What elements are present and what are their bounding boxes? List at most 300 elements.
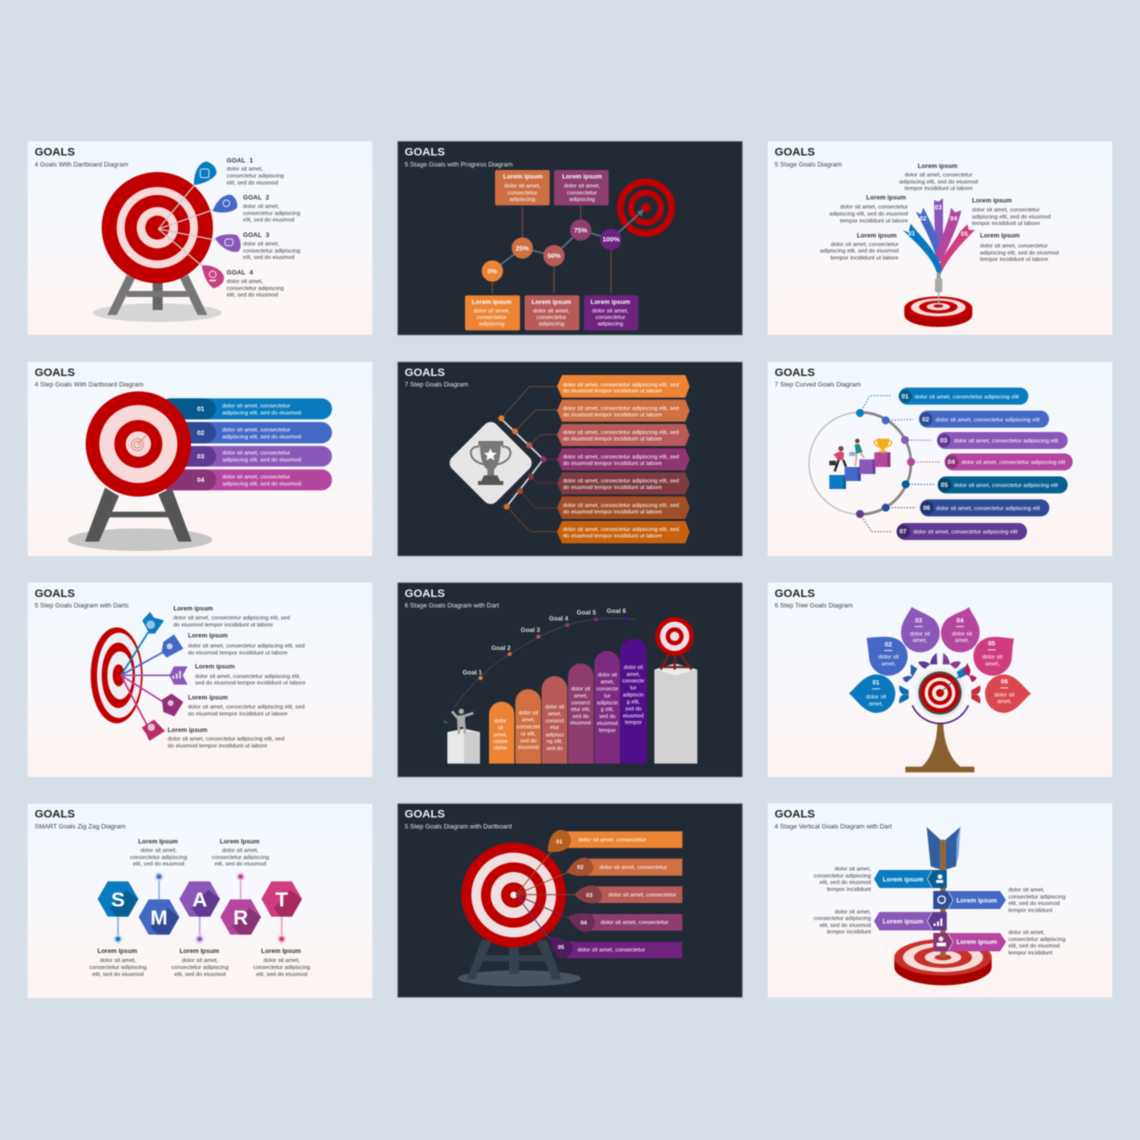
- dart 5: [121, 675, 165, 741]
- text 3: Lorem ipsum: [195, 664, 235, 671]
- bar 01: [548, 830, 682, 852]
- subtitle: 4 Stage Vertical Goals Diagram with Dart: [775, 823, 892, 830]
- text 1: dolor sit amet,: [835, 866, 871, 872]
- bar 5: adipiscin: [597, 700, 618, 706]
- text 5: dolor sit amet, consectetur adipiscing elit, sed: [168, 737, 284, 743]
- icon: dart flight: [957, 666, 967, 678]
- goal labels: Goal 1: [463, 669, 482, 676]
- hexagon A: A: [192, 888, 207, 911]
- title: GOALS: [405, 588, 445, 600]
- text T: consectetur adipiscing: [253, 965, 310, 971]
- arrow shaft: [940, 840, 946, 958]
- angled dartboard: [91, 627, 143, 723]
- step 03: adipiscing elit, sed do eiusmod: [222, 458, 301, 464]
- bar 1: dolor sit amet, consectetur adipiscing elit, sed: [563, 382, 679, 388]
- petal 02: 02: [885, 641, 892, 648]
- step 04: [160, 469, 332, 490]
- dartboard: [86, 391, 191, 497]
- box: bottom 3: adipiscing: [597, 322, 623, 328]
- sign 3: Lorem ipsum: [883, 918, 924, 925]
- text 2: elit, sed do eiusmod: [1008, 901, 1060, 907]
- box: bottom 1: consectetur: [477, 315, 507, 321]
- box: bottom 3: dolor sit amet,: [592, 308, 629, 314]
- text 4: consectetur adipiscing: [1008, 937, 1066, 943]
- 3D target: [894, 939, 992, 985]
- text S: elit, sed do eiusmod: [92, 972, 144, 978]
- bar 3: consect: [545, 718, 565, 724]
- title: GOALS: [775, 809, 815, 821]
- hexagon R: R: [233, 906, 248, 929]
- panel: 6 step tree: [768, 583, 1112, 777]
- right pedestal: [654, 664, 697, 764]
- step 03: [160, 446, 332, 467]
- text M: consectetur adipiscing: [130, 855, 187, 861]
- icon: goal 1 pin: [194, 162, 216, 185]
- text 4: elit, sed do eiusmod: [1008, 944, 1060, 950]
- stand: [458, 940, 581, 986]
- bar 3: dolor sit: [545, 705, 565, 711]
- bar 5: consecte: [596, 686, 618, 692]
- dart barrel: [935, 273, 942, 305]
- text 5: Lorem ipsum: [168, 727, 208, 734]
- bar 2: eiusmod: [518, 745, 539, 751]
- box: bottom 2: consectetur: [536, 315, 566, 321]
- goal 2 text: dolor sit amet,: [243, 204, 280, 210]
- left pedestal and thrower: [443, 709, 480, 764]
- goal 2 text: GOAL 2: [243, 195, 270, 202]
- bar 1: amet,: [494, 732, 508, 738]
- box: top 2: Lorem ipsum: [562, 174, 602, 181]
- goal 1 text: elit, sed do eiusmod: [227, 180, 278, 186]
- petal 05: 05: [988, 641, 996, 648]
- box: bottom 3: [584, 295, 638, 330]
- bar 05: [549, 936, 682, 959]
- pill 05: dolor sit amet, consectetur adipiscing elit: [954, 483, 1059, 489]
- pill 05: 05: [941, 482, 948, 489]
- bar 6: dolor sit: [624, 665, 643, 671]
- box: top 1: consectetur: [507, 190, 537, 196]
- text 1: elit, sed do eiusmod: [820, 880, 871, 886]
- title: GOALS: [35, 367, 75, 379]
- target: [620, 182, 672, 233]
- text 4: do eiusmod tempor incididunt ut labore: [188, 711, 288, 717]
- subtitle: 4 Step Goals With Dartboard Diagram: [35, 382, 143, 389]
- bar 5: [594, 651, 620, 764]
- bar 6: g elit,: [627, 699, 640, 705]
- bar 7: dolor sit amet, consectetur adipiscing elit, sed: [563, 527, 679, 533]
- box: top 2: [554, 170, 609, 205]
- step 03: dolor sit amet, consectetur: [222, 451, 290, 457]
- text 04: Lorem ipsum: [972, 197, 1012, 204]
- pill 03: dolor sit amet, consectetur adipiscing elit: [954, 439, 1059, 445]
- hexagon M: [139, 899, 179, 935]
- node 0%: 0%: [488, 268, 497, 275]
- box: bottom 1: adipiscing: [479, 322, 505, 328]
- bar 5: dolor sit: [598, 673, 617, 679]
- text 3: elit, sed do eiusmod: [820, 923, 871, 929]
- stand and shadow: [93, 275, 222, 322]
- bar 7: [557, 521, 690, 543]
- bar 5: tur: [604, 693, 611, 699]
- bar 4: etur elit,: [571, 707, 591, 713]
- pill 04: 04: [948, 459, 955, 466]
- bar 2: sed do: [520, 738, 537, 744]
- bar 3: [542, 676, 567, 764]
- petal 01: dolor sit: [866, 694, 887, 700]
- bar 3: [557, 424, 690, 446]
- subtitle: 7 Step Goals Diagram: [405, 382, 468, 389]
- text 03: adipiscing elit, sed do eiusmod: [899, 179, 978, 185]
- goal 2 text: consectetur adipiscing: [243, 211, 300, 217]
- bar 3: adipisci: [546, 732, 564, 738]
- bar 02: [567, 858, 682, 876]
- text 3: consectetur adipiscing: [814, 916, 871, 922]
- text S: consectetur adipiscing: [89, 965, 147, 971]
- hexagon A: [179, 881, 220, 917]
- goal 4 text: elit, sed do eiusmod: [227, 293, 278, 299]
- bar 04: 04: [581, 921, 588, 927]
- text 5: do eiusmod tempor incididunt ut labore: [168, 744, 267, 750]
- bar 2: consectet: [517, 725, 540, 731]
- flights: 04: [950, 215, 958, 222]
- connectors: [118, 877, 282, 939]
- text 3: sed do eiusmod tempor incididunt ut labore: [195, 681, 306, 687]
- petal 04: amet,: [955, 638, 970, 644]
- bar 2: [515, 689, 541, 764]
- box: top 2: adipiscing: [569, 197, 595, 203]
- goal labels: [463, 608, 626, 676]
- hexagon T: [261, 881, 302, 917]
- text 1: consectetur adipiscing: [814, 873, 871, 879]
- text R: elit, sed do eiusmod: [215, 862, 266, 868]
- panel: 7 step trophy: [398, 362, 742, 556]
- bar 4: [568, 663, 594, 764]
- text A: Lorem Ipsum: [179, 948, 220, 955]
- goal 4 text: dolor sit amet,: [227, 279, 263, 285]
- text 01: Lorem ipsum: [857, 232, 897, 239]
- text 4: tempor incididunt: [1008, 951, 1053, 957]
- subtitle: 6 Step Tree Goals Diagram: [775, 603, 853, 610]
- bar 05: dolor sit amet, consectetur: [577, 948, 645, 954]
- dart 4: [121, 675, 183, 716]
- text T: elit, sed do eiusmod: [256, 972, 307, 978]
- bar 4: dolor sit: [571, 686, 591, 692]
- box: bottom 1: Lorem ipsum: [472, 299, 512, 306]
- hexagon R: [220, 899, 261, 935]
- text M: elit, sed do eiusmod: [133, 862, 184, 868]
- bar 5: do eiusmod tempor incididunt ut labore: [563, 485, 662, 491]
- goal 1 text: GOAL 1: [227, 157, 253, 164]
- bar 03: 03: [586, 893, 592, 899]
- bar 5: eiusmod: [597, 721, 618, 727]
- hexagon M: M: [150, 906, 168, 929]
- sign 4: Lorem ipsum: [956, 939, 997, 946]
- petal 03: amet,: [913, 638, 928, 644]
- step 01: 01: [197, 406, 205, 413]
- text 3: tempor incididunt: [827, 930, 871, 936]
- goal labels: Goal 2: [491, 645, 511, 652]
- text 1: Lorem ipsum: [173, 605, 213, 612]
- box: bottom 3: consectetur: [595, 315, 625, 321]
- hexagon S: S: [111, 888, 125, 911]
- goal labels: Goal 3: [521, 627, 540, 634]
- text 01: adipiscing elit, sed do eiusmod: [820, 249, 899, 255]
- petal 04: 04: [956, 617, 964, 624]
- bar 04: dolor sit amet, consectetur: [601, 920, 669, 926]
- bar 5: [557, 472, 690, 494]
- bar 4: eiusmod: [570, 721, 591, 727]
- title: GOALS: [775, 367, 815, 379]
- bar 2: ur elit,: [521, 731, 536, 737]
- petal 04: [941, 607, 980, 652]
- icon: goal 4 pin: [202, 265, 224, 288]
- box: top 1: Lorem ipsum: [503, 174, 543, 181]
- leaf wings: [899, 653, 981, 704]
- box: bottom 2: adipiscing: [538, 322, 564, 328]
- text 01: dolor sit amet, consectetur: [831, 242, 899, 248]
- pill 02: 02: [922, 416, 930, 423]
- pill 07: [897, 523, 1027, 540]
- bar 4: amet,: [574, 693, 588, 699]
- text R: Lorem Ipsum: [220, 838, 260, 845]
- pill 04: [945, 453, 1073, 470]
- goal markers: [479, 616, 627, 680]
- bar 6: [620, 639, 647, 764]
- bar 6: tempor: [625, 720, 642, 726]
- text 05: dolor sit amet, consectetur: [980, 243, 1048, 249]
- dartboard: [915, 668, 965, 718]
- petal 04: dolor sit: [952, 631, 973, 637]
- text S: Lorem Ipsum: [97, 948, 138, 955]
- pill 01: 01: [901, 393, 909, 400]
- step 02: 02: [197, 430, 205, 437]
- text 05: Lorem ipsum: [980, 233, 1020, 240]
- step 04: 04: [197, 477, 205, 484]
- node 25%: 25%: [516, 245, 529, 252]
- bar 4: sed do: [572, 714, 589, 720]
- box: top 1: adipiscing: [509, 197, 535, 203]
- petal 02: amet,: [881, 661, 896, 667]
- icon: trophy: [874, 439, 892, 453]
- title: GOALS: [405, 809, 445, 821]
- bar 6: sed do: [625, 706, 642, 712]
- panel: 5 stage dart: [768, 141, 1112, 335]
- step 02: dolor sit amet, consectetur: [222, 427, 290, 433]
- bar 3: amet,: [548, 711, 562, 717]
- bar 1: ctetur: [494, 746, 507, 752]
- subtitle: 5 Step Goals Diagram with Dartboard: [405, 823, 512, 830]
- text 04: tempor incididunt ut labore: [972, 221, 1040, 227]
- bar 04: [568, 913, 682, 932]
- bar 02: 02: [577, 865, 583, 871]
- title: GOALS: [775, 588, 815, 600]
- petal 06: 06: [1001, 679, 1008, 686]
- text T: Lorem Ipsum: [261, 948, 301, 955]
- goal labels: Goal 4: [549, 615, 569, 622]
- pill 02: [919, 411, 1049, 428]
- chevron line: [501, 419, 543, 507]
- dartboard: [102, 172, 215, 283]
- petal 03: dolor sit: [910, 631, 931, 637]
- goal 3 text: GOAL 3: [243, 232, 270, 239]
- nodes: [856, 409, 915, 518]
- bar 6: consecte: [622, 679, 644, 685]
- box: bottom 1: dolor sit amet,: [474, 308, 510, 314]
- text 2: tempor incididunt: [1008, 908, 1053, 914]
- panel: 5 step dartboard dark: [398, 804, 742, 997]
- text M: dolor sit amet,: [141, 848, 177, 854]
- text 03: Lorem ipsum: [918, 163, 958, 170]
- flights: [903, 198, 975, 273]
- bar 02: dolor sit amet, consectetur: [599, 865, 667, 871]
- bar 05: 05: [558, 945, 564, 951]
- climbers: [829, 439, 864, 471]
- node 25%: [512, 237, 533, 259]
- text T: dolor sit amet,: [264, 958, 300, 964]
- text 2: dolor sit amet,: [1008, 887, 1045, 893]
- bar 2: do eiusmod tempor incididunt ut labore: [563, 413, 662, 419]
- bar 01: 01: [556, 840, 562, 846]
- node 50%: [543, 245, 565, 266]
- sign 2: Lorem ipsum: [956, 897, 997, 904]
- bar 6: amet,: [627, 672, 641, 678]
- text M: Lorem Ipsum: [138, 838, 178, 845]
- arc: [912, 705, 968, 723]
- bar 5: amet,: [601, 680, 615, 686]
- text 03: dolor sit amet, consectetur: [905, 173, 973, 179]
- step 01: dolor sit amet, consectetur: [222, 404, 290, 410]
- pill 07: 07: [899, 529, 907, 536]
- dartboard: [461, 843, 566, 947]
- pill 03: [937, 432, 1068, 449]
- node 100%: [600, 229, 622, 250]
- flights: 02: [919, 215, 927, 222]
- petal 03: [901, 607, 940, 652]
- tree trunk: [905, 723, 974, 772]
- subtitle: 5 Stage Goals Diagram: [775, 161, 842, 168]
- title: GOALS: [35, 588, 75, 600]
- sign 1: [874, 870, 947, 888]
- box: bottom 2: [525, 295, 579, 330]
- title: GOALS: [405, 367, 445, 379]
- box: top 1: [495, 170, 550, 205]
- icon: goal 2 pin: [213, 195, 237, 213]
- dart 3: [121, 666, 188, 685]
- sign 4: [933, 933, 1006, 951]
- text 1: dolor sit amet, consectetur adipiscing elit, sed: [173, 615, 290, 621]
- arrow flights: [927, 827, 960, 870]
- node 100%: 100%: [602, 237, 620, 244]
- bar 1: do eiusmod tempor incididunt ut labore: [563, 389, 662, 395]
- board: [904, 296, 972, 327]
- text 2: do eiusmod tempor incididunt ut labore: [188, 650, 288, 656]
- step 04: dolor sit amet, consectetur: [222, 474, 290, 480]
- box: top 2: dolor sit amet,: [564, 183, 601, 189]
- bar 3: etur: [550, 725, 560, 731]
- panel: 5 stage progress: [398, 141, 742, 335]
- text 1: do eiusmod tempor incididunt ut labore: [173, 622, 273, 628]
- target on stand: [655, 617, 694, 670]
- pill 06: 06: [923, 505, 931, 512]
- bar 6: tur: [630, 686, 637, 692]
- bar 4: dolor sit amet, consectetur adipiscing elit, sed: [563, 454, 679, 460]
- bar 3: do eiusmod tempor incididunt ut labore: [563, 437, 662, 443]
- pill 06: [920, 499, 1049, 516]
- goal 3 text: consectetur adipiscing: [243, 248, 300, 254]
- subtitle: 4 Goals With Dartboard Diagram: [35, 161, 128, 168]
- panel: 4 step dartboard: [28, 362, 372, 556]
- text 05: adipiscing elit, sed do eiusmod: [980, 250, 1059, 256]
- petal 05: [973, 637, 1014, 676]
- bar 1: [489, 702, 514, 764]
- box: top 2: consectetur: [567, 190, 597, 196]
- petal 06: amet,: [997, 699, 1012, 705]
- text R: consectetur adipiscing: [212, 855, 269, 861]
- title: GOALS: [35, 147, 75, 159]
- step 02: adipiscing elit, sed do eiusmod: [222, 434, 301, 440]
- title: GOALS: [405, 147, 445, 159]
- step 03: 03: [197, 453, 205, 460]
- bar 5: g elit,: [601, 707, 614, 713]
- flights: 03: [935, 205, 942, 212]
- ring: [809, 412, 911, 514]
- text 3: dolor sit amet, consectetur adipiscing elit,: [195, 674, 301, 680]
- bar 2: amet,: [522, 718, 536, 724]
- node 75%: [570, 219, 591, 241]
- subtitle: SMART Goals Zig Zag Diagram: [35, 823, 126, 830]
- text A: elit, sed do eiusmod: [174, 972, 226, 978]
- nodes: [498, 415, 546, 510]
- pill 05: [938, 476, 1068, 493]
- bar 7: do eiusmod tempor incididunt ut labore: [563, 534, 662, 540]
- title: GOALS: [775, 147, 815, 159]
- bar 1: dolor: [494, 719, 507, 725]
- bar 5: tempor: [599, 728, 616, 734]
- bar 6: eiusmod: [623, 713, 644, 719]
- pill 02: dolor sit amet, consectetur adipiscing elit: [936, 417, 1040, 423]
- bar 1: conse: [493, 739, 508, 745]
- bar 6: [557, 496, 690, 519]
- step 01: adipiscing elit, sed do eiusmod: [222, 411, 301, 417]
- box: top 1: dolor sit amet,: [504, 183, 541, 189]
- box: bottom 2: dolor sit amet,: [533, 308, 570, 314]
- step 01: [160, 398, 332, 419]
- subtitle: 6 Stage Goals Diagram with Dart: [405, 603, 499, 610]
- bar 6: dolor sit amet, consectetur adipiscing elit, sed: [563, 503, 679, 509]
- text 01: tempor incididunt ut labore: [831, 255, 899, 261]
- goal 2 text: elit, sed do eiusmod: [243, 218, 294, 224]
- progress line and arrow: [492, 209, 644, 271]
- pill 01: [899, 388, 1028, 405]
- sign 3: [874, 912, 947, 930]
- goal 1 text: consectetur adipiscing: [227, 174, 284, 180]
- bar 03: [575, 885, 682, 903]
- subtitle: 5 Step Goals Diagram with Darts: [35, 603, 129, 610]
- text 3: dolor sit amet,: [835, 909, 871, 915]
- petal 01: [849, 674, 895, 713]
- text 02: dolor sit amet, consectetur: [840, 205, 908, 211]
- goal 4 text: consectetur adipiscing: [227, 286, 284, 292]
- text 02: Lorem ipsum: [866, 195, 906, 202]
- bar 5: dolor sit amet, consectetur adipiscing elit, sed: [563, 478, 679, 484]
- title: GOALS: [35, 809, 75, 821]
- text 4: Lorem ipsum: [188, 694, 228, 701]
- petal 05: amet,: [985, 661, 1000, 667]
- box: bottom 2: Lorem ipsum: [531, 299, 572, 306]
- step 02: [160, 422, 332, 443]
- text 04: dolor sit amet, consectetur: [972, 207, 1040, 213]
- goal 1 text: dolor sit amet,: [227, 167, 263, 173]
